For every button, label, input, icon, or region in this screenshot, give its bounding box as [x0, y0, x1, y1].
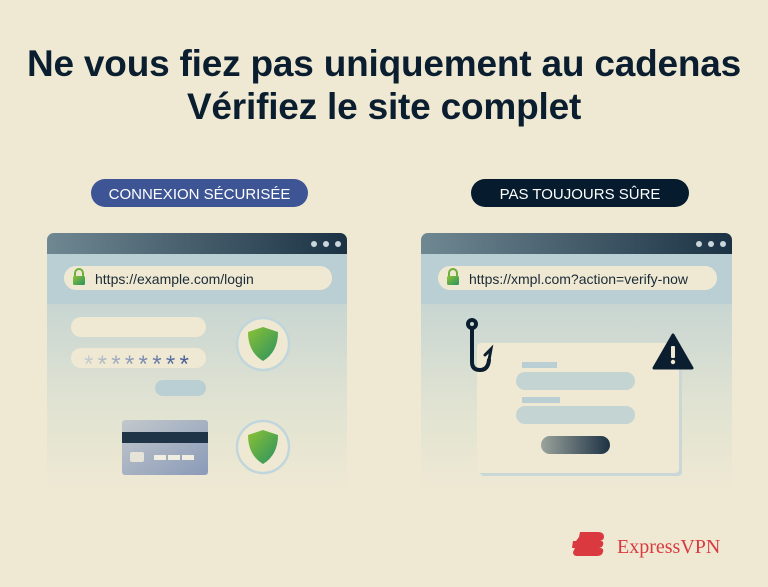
- icon: lock: [447, 269, 459, 285]
- logo: ExpressVPN: [572, 532, 720, 558]
- login form: ********: [84, 351, 193, 378]
- pill: pas toujours sûre: PAS TOUJOURS SÛRE: [500, 186, 660, 203]
- icon: warning: [654, 335, 692, 368]
- pill: pas toujours sûre: [471, 179, 689, 207]
- pill: connexion sécurisée: CONNEXION SÉCURISÉE: [109, 186, 290, 203]
- url bar: https://xmpl.com?action=verify-now: [469, 271, 689, 287]
- pill: connexion sécurisée: [91, 179, 308, 207]
- title: Ne vous fiez pas uniquement au cadenas: [27, 43, 741, 84]
- logo: ExpressVPN: ExpressVPN: [617, 536, 720, 558]
- url bar: [438, 266, 717, 290]
- fake dialog: [477, 343, 682, 476]
- icon: shield 2: [237, 421, 289, 473]
- icon: lock: [73, 269, 85, 285]
- panel: phishing browser: [421, 233, 732, 494]
- title: [27, 43, 741, 127]
- login form: [71, 317, 206, 396]
- icon: fishing hook: [468, 320, 491, 370]
- icon: shield 1: [237, 318, 289, 370]
- panel: secure browser: [47, 233, 347, 494]
- title: Vérifiez le site complet: [187, 86, 581, 127]
- url bar: [64, 266, 332, 290]
- url bar: https://example.com/login: [95, 271, 254, 287]
- credit card: [122, 420, 208, 475]
